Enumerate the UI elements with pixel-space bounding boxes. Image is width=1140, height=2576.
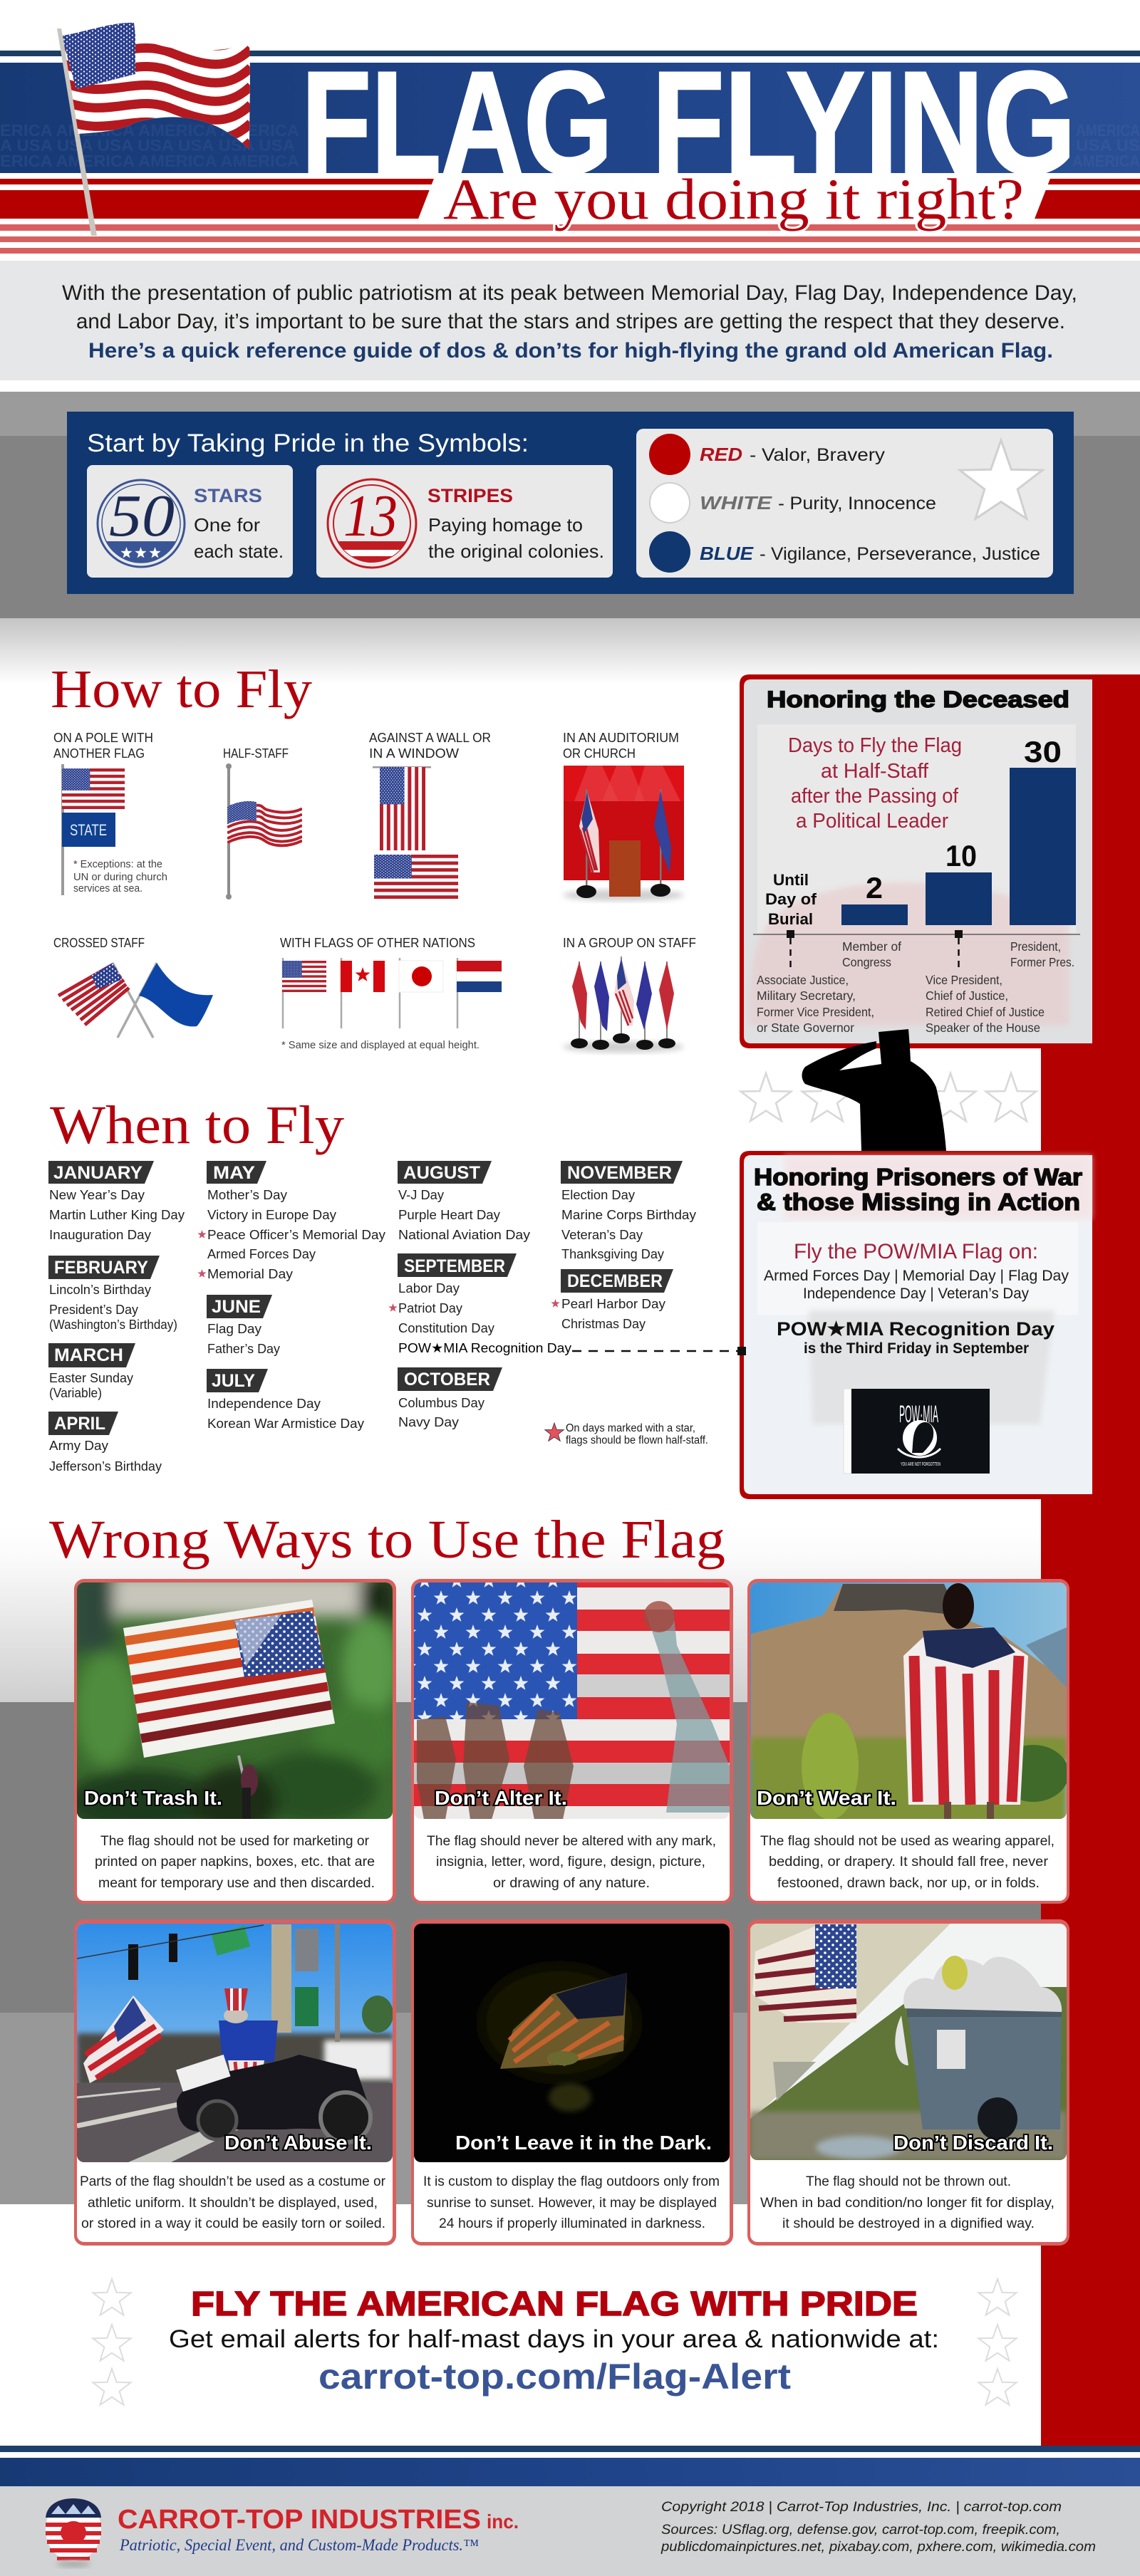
bar chart: Military Secretary, (757, 989, 856, 1003)
caption (760, 1834, 1054, 1891)
copyright and sources: Sources: USflag.org, defense.gov, carrot-top.com, freepik.com, (661, 2523, 1060, 2538)
june days: Father’s Day (207, 1341, 281, 1356)
intro text block: Here’s a quick reference guide of dos & don’ts for high-flying the grand old American Flag. (88, 339, 1053, 363)
bar chart: Day of (765, 890, 817, 908)
march days: Easter Sunday (49, 1370, 134, 1385)
april days: Jefferson’s Birthday (49, 1459, 162, 1474)
how to fly: crossed staff (53, 935, 213, 1038)
caption: insignia, letter, word, figure, design, picture, (436, 1855, 705, 1870)
how to fly: other nations: * Same size and displayed at equal height. (281, 1039, 480, 1051)
calendar column 4 (545, 1161, 708, 1446)
panel: honoring the deceased (740, 674, 1092, 1048)
bar chart: 30 (1024, 735, 1062, 768)
title (301, 41, 1076, 204)
bar chart: President, (1010, 939, 1061, 954)
footer bands (0, 2446, 1140, 2576)
header banner (0, 51, 1140, 254)
month: april (48, 1412, 118, 1435)
panel: honoring prisoners of war (740, 1151, 1092, 1499)
how to fly: group on staff: IN A GROUP ON STAFF (563, 935, 696, 950)
how to fly: auditorium (563, 730, 684, 901)
caption: The flag should never be altered with any mark, (427, 1834, 716, 1849)
caption: The flag should not be used for marketing or (100, 1834, 370, 1849)
april days (49, 1438, 162, 1474)
card: colors: - Valor, Bravery (750, 445, 886, 465)
logo (46, 2498, 519, 2567)
august days: V-J Day (398, 1187, 445, 1202)
star legend: flags should be flown half-staff. (566, 1434, 708, 1446)
pow flag days: Fly the POW/MIA Flag on: (794, 1240, 1038, 1263)
bar chart: Retired Chief of Justice (926, 1005, 1045, 1019)
call to action: FLY THE AMERICAN FLAG WITH PRIDE (191, 2285, 918, 2323)
card: stripes: the original colonies. (428, 541, 604, 562)
intro text block: With the presentation of public patriotism at its peak between Memorial Day, Flag Day, Independence Day, (62, 281, 1077, 305)
title: FLAG (301, 41, 613, 204)
december days: Pearl Harbor Day (561, 1296, 666, 1311)
may days: Armed Forces Day (207, 1246, 316, 1261)
month: july (207, 1369, 268, 1392)
card: don't discard it (747, 1919, 1069, 2246)
month: june: JUNE (212, 1297, 261, 1317)
how to fly: on a pole: ON A POLE WITH (53, 730, 153, 745)
chart heading: after the Passing of (791, 785, 959, 808)
caption: It is custom to display the flag outdoors only from (423, 2174, 720, 2189)
caption: sunrise to sunset. However, it may be displayed (427, 2196, 717, 2211)
february days: Lincoln’s Birthday (49, 1282, 152, 1297)
icon: waving flag (63, 23, 250, 150)
photo: balloon flag (77, 1582, 393, 1819)
how to fly: on a pole: ANOTHER FLAG (53, 746, 145, 761)
star legend: On days marked with a star, (566, 1422, 695, 1434)
may days: Memorial Day (207, 1266, 294, 1281)
january days: New Year’s Day (49, 1187, 145, 1202)
may days: Peace Officer’s Memorial Day (207, 1227, 386, 1242)
card: colors (636, 429, 1053, 578)
september days (388, 1281, 572, 1355)
logo: CARROT-TOP INDUSTRIES (118, 2505, 481, 2535)
bar chart: Vice President, (926, 973, 1002, 987)
card: stars: each state. (194, 541, 284, 562)
caption: The flag should not be thrown out. (806, 2174, 1011, 2189)
caption (427, 1834, 716, 1891)
how to fly: against a wall (369, 730, 491, 899)
photo: discarded flag and dumpster (750, 1924, 1067, 2160)
chart heading: a Political Leader (796, 810, 948, 833)
august days: National Aviation Day (398, 1227, 531, 1242)
heading: prisoners of war (754, 1164, 1082, 1215)
caption: The flag should not be used as wearing apparel, (760, 1834, 1054, 1849)
card: stars: 50 (109, 483, 175, 549)
card: don't leave it in the dark (411, 1919, 733, 2246)
card: stripes: Paying homage to (428, 514, 583, 536)
month: october: OCTOBER (404, 1370, 490, 1389)
month: march (48, 1343, 135, 1367)
bar chart: 10 (945, 839, 977, 872)
january days: Martin Luther King Day (49, 1207, 185, 1222)
card: don't wear it: Don’t Wear It. (757, 1787, 896, 1809)
october days: Columbus Day (398, 1395, 485, 1410)
card: don't wear it (747, 1579, 1069, 1904)
icon: pow mia flag: YOU ARE NOT FORGOTTEN (901, 1462, 940, 1467)
heading: When to Fly: When to Fly (50, 1095, 344, 1155)
card: don't leave it in the dark: Don’t Leave it in the Dark. (455, 2132, 712, 2154)
month: january: JANUARY (53, 1163, 142, 1183)
month: july: JULY (212, 1371, 255, 1391)
card: stripes: 13 (343, 483, 398, 549)
card: don't abuse it (74, 1919, 396, 2246)
november days: Election Day (561, 1187, 636, 1202)
stars: left (93, 2279, 131, 2405)
how to fly: on a pole: services at sea. (73, 882, 142, 895)
december days: Christmas Day (561, 1316, 646, 1331)
photo: altered flag (414, 1582, 730, 1820)
february days: President’s Day (49, 1302, 139, 1317)
caption (760, 2174, 1054, 2231)
november days: Thanksgiving Day (561, 1246, 665, 1261)
june days: Flag Day (207, 1321, 262, 1336)
intro text block (0, 261, 1140, 380)
icon: pow mia flag: POW·MIA (899, 1401, 938, 1428)
how to fly: group on staff (563, 935, 696, 1053)
card: stars: One for (194, 514, 260, 536)
august days (398, 1187, 531, 1242)
caption: festooned, drawn back, nor up, or in folds. (777, 1876, 1040, 1891)
june days (207, 1321, 281, 1356)
month: august (398, 1161, 492, 1184)
february days (49, 1282, 177, 1332)
september days: Constitution Day (398, 1320, 495, 1335)
bar chart: Associate Justice, (757, 973, 849, 987)
november days (561, 1187, 697, 1261)
month: may: MAY (213, 1163, 255, 1183)
photo: motorcycle parade (77, 1924, 393, 2162)
month: february: FEBRUARY (54, 1258, 148, 1278)
may days: Victory in Europe Day (207, 1207, 337, 1222)
caption: or stored in a way it could be easily torn or soiled. (81, 2216, 385, 2231)
copyright and sources: publicdomainpictures.net, pixabay.com, pxhere.com, wikimedia.com (660, 2540, 1096, 2555)
caption (80, 2174, 386, 2231)
july days: Independence Day (207, 1396, 321, 1411)
how to fly: half-staff (223, 746, 302, 899)
september days: Patriot Day (398, 1300, 463, 1315)
calendar column 1 (48, 1161, 185, 1474)
card: don't discard it: Don’t Discard It. (893, 2132, 1053, 2154)
card: don't alter it: Don’t Alter It. (435, 1787, 567, 1809)
caption: printed on paper napkins, boxes, etc. that are (95, 1855, 375, 1870)
card: colors: BLUE (700, 543, 754, 564)
heading: prisoners of war: & those Missing in Action (757, 1189, 1080, 1215)
bar chart: Chief of Justice, (926, 989, 1008, 1003)
how to fly: on a pole (53, 730, 167, 895)
chart heading: at Half-Staff (821, 760, 929, 783)
september days: POW★MIA Recognition Day (398, 1340, 572, 1355)
header banner: ERICA AMERICA AMERICA AMERICA (0, 121, 299, 140)
bar chart: Speaker of the House (926, 1021, 1040, 1035)
intro text block: and Labor Day, it’s important to be sure that the stars and stripes are getting the respect that they deserve. (76, 310, 1065, 333)
chart heading: Days to Fly the Flag (788, 734, 962, 757)
march days: (Variable) (49, 1385, 102, 1400)
month: march: MARCH (54, 1345, 123, 1365)
card: don't trash it: Don’t Trash It. (84, 1787, 222, 1809)
bar chart (753, 735, 1080, 1035)
bar chart: Until (773, 871, 809, 889)
month: august: AUGUST (403, 1163, 480, 1183)
card: colors: - Purity, Innocence (778, 494, 936, 513)
how to fly: auditorium: OR CHURCH (563, 746, 636, 761)
heading: Wrong Ways: Wrong Ways to Use the Flag (49, 1510, 725, 1570)
card: stripes (316, 465, 613, 578)
december days (551, 1296, 666, 1331)
pow flag days: is the Third Friday in September (804, 1340, 1029, 1357)
february days: (Washington’s Birthday) (49, 1317, 177, 1332)
copyright and sources: Copyright 2018 | Carrot-Top Industries, Inc. | carrot-top.com (661, 2500, 1062, 2515)
caption: athletic uniform. It shouldn’t be displayed, used, (88, 2196, 378, 2211)
month: november: NOVEMBER (567, 1163, 672, 1183)
gray symbols background (0, 392, 1140, 684)
red side column (1041, 674, 1140, 2446)
stars: right (978, 2279, 1017, 2405)
logo: inc. (487, 2510, 519, 2533)
july days (207, 1396, 365, 1431)
bar chart: Former Vice President, (757, 1005, 874, 1019)
august days: Purple Heart Day (398, 1207, 501, 1222)
pow flag days: POW★MIA Recognition Day (777, 1318, 1054, 1340)
chart heading (788, 734, 962, 833)
pow flag days (764, 1240, 1069, 1357)
bar chart: Congress (842, 955, 891, 969)
card: don't alter it (411, 1579, 733, 1904)
card: colors: WHITE (700, 492, 772, 513)
logo: Patriotic, Special Event, and Custom-Made Products.™ (119, 2536, 479, 2554)
january days (49, 1187, 185, 1242)
heading: How to Fly: How to Fly (51, 659, 312, 719)
copyright and sources (660, 2500, 1096, 2555)
caption: bedding, or drapery. It should fall free, never (769, 1855, 1049, 1870)
call to action: Get email alerts for half-mast days in your area & nationwide at: (169, 2325, 939, 2353)
bar chart: or State Governor (757, 1021, 854, 1035)
card: stripes: STRIPES (428, 485, 513, 506)
star legend (545, 1422, 708, 1446)
may days: Mother’s Day (207, 1187, 288, 1202)
header banner: USA US (1076, 136, 1140, 155)
stars row (741, 1073, 1036, 1121)
dashed connector (572, 1347, 746, 1355)
month: december: DECEMBER (567, 1271, 663, 1291)
header banner: ERICA AMERICA AMERICA AMERICA (0, 152, 299, 170)
photo: flag at night (414, 1924, 730, 2162)
calendar column 2 (197, 1161, 386, 1431)
how to fly: other nations: WITH FLAGS OF OTHER NATIONS (280, 935, 475, 950)
photo: flag as cape (750, 1582, 1069, 1823)
panel: symbols (67, 412, 1074, 594)
calendar column 3 (388, 1161, 572, 1429)
bar chart: Burial (768, 910, 813, 928)
soldier silhouette (802, 1029, 946, 1151)
september days: Labor Day (398, 1281, 460, 1295)
caption: 24 hours if properly illuminated in darkness. (439, 2216, 705, 2231)
how to fly: on a pole: UN or during church (73, 871, 167, 883)
subtitle: Are you doing it right? (443, 167, 1024, 231)
caption: or drawing of any nature. (493, 1876, 650, 1891)
july days: Korean War Armistice Day (207, 1416, 365, 1431)
october days (398, 1395, 485, 1429)
caption: it should be destroyed in a dignified way. (782, 2216, 1035, 2231)
call to action: carrot-top.com/Flag-Alert (318, 2357, 791, 2397)
wrong ways background (0, 1524, 1041, 2204)
card: don't abuse it: Don’t Abuse It. (224, 2132, 372, 2154)
october days: Navy Day (398, 1414, 460, 1429)
may days (197, 1187, 386, 1281)
how to fly: against a wall: AGAINST A WALL OR (369, 730, 491, 745)
caption: Parts of the flag shouldn’t be used as a costume or (80, 2174, 386, 2189)
card: don't trash it (64, 1574, 399, 1904)
icon: pow mia flag (844, 1389, 990, 1474)
flag pole (57, 28, 97, 236)
how to fly: auditorium: IN AN AUDITORIUM (563, 730, 679, 745)
april days: Army Day (49, 1438, 109, 1453)
header banner: A USA USA USA USA USA USA USA (0, 136, 295, 155)
november days: Veteran’s Day (561, 1227, 643, 1242)
heading: symbols: Start by Taking Pride in the Symbols: (87, 429, 529, 457)
call to action (93, 2279, 1017, 2405)
card: colors: RED (700, 444, 742, 465)
month: april: APRIL (54, 1414, 105, 1434)
month: june (207, 1295, 272, 1318)
pow flag days: Armed Forces Day | Memorial Day | Flag Day (764, 1268, 1069, 1284)
how to fly: on a pole: STATE (70, 821, 107, 839)
caption (423, 2174, 720, 2231)
pow flag days: Independence Day | Veteran’s Day (803, 1286, 1029, 1302)
caption: When in bad condition/no longer fit for display, (760, 2196, 1054, 2211)
bar chart: Member of (842, 939, 901, 954)
how to fly: other nations (280, 935, 502, 1051)
how to fly: on a pole: * Exceptions: at the (73, 858, 162, 870)
how to fly: crossed staff: CROSSED STAFF (53, 935, 145, 950)
march days (49, 1370, 134, 1400)
heading: honoring the deceased: Honoring the Deceased (767, 687, 1069, 712)
november days: Marine Corps Birthday (561, 1207, 697, 1222)
card: stars: STARS (194, 485, 262, 506)
heading: prisoners of war: Honoring Prisoners of War (754, 1164, 1082, 1190)
bar chart: 2 (866, 871, 883, 904)
month: september: SEPTEMBER (404, 1256, 505, 1276)
how to fly: half-staff: HALF-STAFF (223, 746, 289, 761)
bar chart: Former Pres. (1010, 955, 1074, 969)
caption (95, 1834, 375, 1891)
card: colors: - Vigilance, Perseverance, Justice (760, 544, 1040, 564)
caption: meant for temporary use and then discarded. (98, 1876, 375, 1891)
january days: Inauguration Day (49, 1227, 152, 1242)
card: stars (87, 465, 293, 578)
month: may (207, 1161, 266, 1184)
how to fly: against a wall: IN A WINDOW (369, 746, 460, 761)
